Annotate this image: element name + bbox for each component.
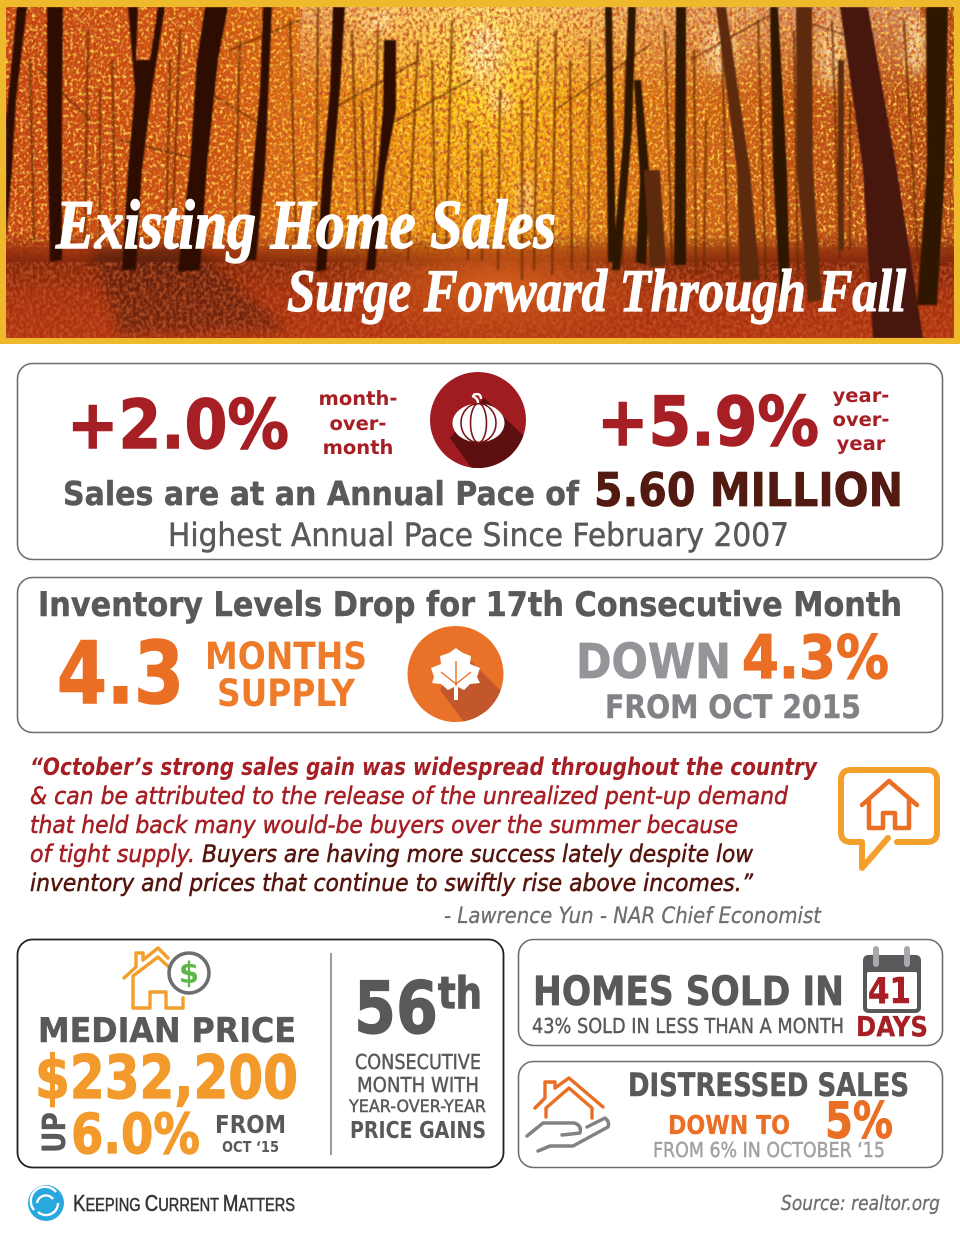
label: from oct 15: FROM bbox=[215, 1110, 286, 1139]
logo wordmark: KEEPING CURRENT MATTERS bbox=[73, 1190, 295, 1216]
heading: median price: MEDIAN PRICE bbox=[38, 1011, 296, 1051]
icon: house with dollar: $ bbox=[179, 956, 199, 990]
text: from 6 percent: FROM 6% IN OCTOBER ‘15 bbox=[653, 1138, 885, 1162]
icon: calendar bbox=[863, 946, 921, 1013]
right trunks bbox=[605, 7, 948, 305]
quote attribution: - Lawrence Yun - NAR Chief Economist bbox=[444, 904, 822, 929]
header photo: autumn forest bbox=[0, 0, 960, 344]
panel: days on market bbox=[518, 940, 942, 1046]
stat: 6.0 percent: 6.0% bbox=[71, 1102, 200, 1166]
label: month-over-month: over- bbox=[329, 412, 387, 435]
logo: keeping current matters bbox=[28, 1185, 295, 1221]
stat: 5 percent: 5% bbox=[825, 1092, 893, 1150]
quote: that held back many would-be buyers over the summer because bbox=[30, 811, 738, 839]
text: consecutive month: CONSECUTIVE bbox=[355, 1050, 481, 1074]
label: from oct 15: OCT ‘15 bbox=[222, 1138, 279, 1156]
icon: house with dollar bbox=[124, 948, 209, 1008]
stat: 5.60 million: 5.60 MILLION bbox=[594, 463, 903, 517]
label: year-over-year: year bbox=[837, 432, 886, 455]
text: from oct 2015: FROM OCT 2015 bbox=[605, 688, 861, 726]
icon: pumpkin bbox=[430, 372, 526, 468]
icon: house in hand bbox=[527, 1078, 609, 1151]
quote: “October’s strong sales gain was widespread throughout the country bbox=[30, 753, 818, 781]
stat: price: $232,200 bbox=[35, 1043, 298, 1113]
label: month-over-month: month bbox=[323, 436, 393, 459]
stat: 56th: th bbox=[438, 968, 482, 1019]
quote: Buyers are having more success lately despite low bbox=[202, 840, 753, 868]
label: year-over-year: over- bbox=[832, 408, 890, 431]
icon: maple leaf bbox=[408, 626, 504, 722]
text: sales pace: Sales are at an Annual Pace of bbox=[63, 474, 580, 513]
text: price gains: PRICE GAINS bbox=[350, 1118, 486, 1144]
text: consecutive month: YEAR-OVER-YEAR bbox=[348, 1097, 486, 1117]
stat: 4.3 percent: 4.3% bbox=[742, 623, 889, 693]
text: highest pace: Highest Annual Pace Since February 2007 bbox=[168, 516, 789, 554]
icon: house speech bubble bbox=[841, 770, 937, 868]
text: 43 percent: 43% SOLD IN LESS THAN A MONTH bbox=[532, 1014, 844, 1038]
title line 1: Existing Home Sales bbox=[55, 187, 556, 264]
text: down to: DOWN TO bbox=[668, 1111, 790, 1141]
stat: months supply: 4.3 bbox=[57, 624, 184, 724]
panel: inventory bbox=[18, 578, 942, 732]
text: down: DOWN bbox=[576, 634, 731, 690]
panel: median price bbox=[18, 940, 504, 1168]
icon: calendar: 41 bbox=[868, 971, 911, 1012]
label: month-over-month: month- bbox=[319, 387, 397, 410]
stat: month over month: +2.0% bbox=[67, 386, 289, 465]
label: year-over-year: year- bbox=[833, 384, 889, 407]
thin background trees bbox=[30, 7, 918, 280]
stat: 56th: 56 bbox=[354, 966, 438, 1050]
logo swirl bbox=[28, 1185, 64, 1221]
quote: of tight supply. bbox=[30, 840, 195, 868]
label: up: UP bbox=[35, 1112, 73, 1153]
label: days: DAYS bbox=[856, 1010, 928, 1043]
panel: distressed sales bbox=[518, 1062, 942, 1168]
quote: & can be attributed to the release of the unrealized pent-up demand bbox=[30, 782, 789, 810]
heading: homes sold in: HOMES SOLD IN bbox=[533, 969, 844, 1015]
label: months supply: MONTHS bbox=[205, 635, 367, 678]
dark left trunks bbox=[6, 7, 396, 272]
text: consecutive month: MONTH WITH bbox=[357, 1073, 479, 1097]
label: months supply: SUPPLY bbox=[217, 672, 356, 715]
quote bbox=[30, 753, 818, 897]
quote: inventory and prices that continue to swiftly rise above incomes.” bbox=[30, 869, 754, 897]
stat: year over year: +5.9% bbox=[597, 383, 819, 462]
panel: annual sales pace bbox=[18, 364, 942, 560]
